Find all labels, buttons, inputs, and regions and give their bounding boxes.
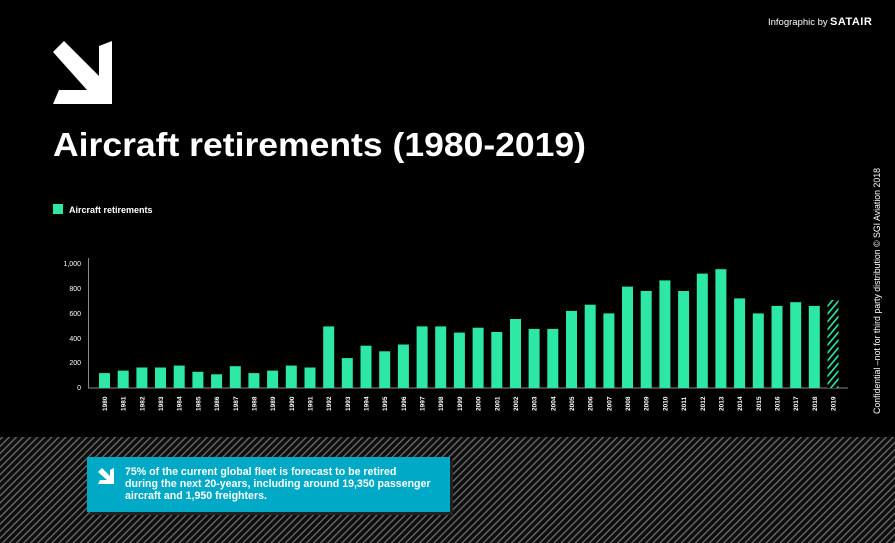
brand: infographic by SATAIR: SATAIR: [830, 16, 872, 28]
bar chart: [63, 258, 848, 411]
x axis year labels: 2012: [700, 396, 707, 411]
callout box: [87, 457, 453, 515]
x axis year labels: 1994: [364, 396, 370, 411]
x axis year labels: 2002: [513, 396, 520, 411]
legend: Aircraft retirements: [69, 205, 153, 215]
y axis labels: 0: [77, 385, 81, 392]
x axis year labels: 1995: [382, 396, 389, 411]
x axis year labels: 1992: [326, 396, 333, 411]
vertical confidentiality note: Confidential –not for third party distribution © SGI Aviation 2018: [872, 168, 882, 414]
callout box: during the next 20-years, including around 19,350 passenger: [125, 478, 431, 490]
x axis year labels: 1988: [251, 396, 258, 411]
callout box: 75% of the current global fleet is forecast to be retired: [125, 466, 396, 478]
y axis labels: 400: [69, 336, 81, 343]
x axis year labels: 1996: [401, 396, 408, 411]
x axis year labels: 1990: [289, 396, 296, 411]
x axis year labels: 2000: [476, 396, 483, 411]
icon: small arrow: [98, 468, 114, 484]
x axis year labels: 2017: [793, 396, 800, 411]
x axis year labels: 2014: [737, 396, 744, 411]
y axis labels: 200: [69, 360, 81, 367]
x axis year labels: 1981: [121, 396, 128, 411]
x axis year labels: 1986: [214, 396, 221, 411]
x axis year labels: 1983: [158, 396, 165, 411]
x axis year labels: 2001: [494, 396, 501, 411]
x axis year labels: 2009: [644, 396, 651, 411]
x axis year labels: 1999: [457, 396, 464, 411]
bars: [99, 269, 820, 388]
y axis labels: 600: [69, 311, 81, 318]
x axis year labels: 2004: [550, 396, 557, 411]
y axis labels: 800: [69, 286, 81, 293]
x axis year labels: [102, 396, 838, 411]
title: Aircraft retirements (1980-2019): [53, 126, 586, 163]
x axis year labels: 1991: [308, 396, 314, 411]
x axis year labels: 2007: [606, 396, 613, 411]
brand: infographic by SATAIR: Infographic by: [768, 17, 828, 28]
x axis year labels: 1987: [233, 396, 240, 411]
x axis year labels: 2003: [532, 396, 539, 411]
icon: arrow: [53, 41, 112, 104]
x axis year labels: 1980: [102, 396, 109, 411]
x axis year labels: 1984: [177, 396, 184, 411]
callout box: aircraft and 1,950 freighters.: [125, 490, 267, 502]
brand: infographic by SATAIR: [768, 16, 872, 28]
x axis year labels: 2015: [756, 396, 763, 411]
y axis labels: [63, 261, 81, 392]
x axis year labels: 2018: [812, 396, 819, 411]
y axis labels: 1,000: [63, 261, 81, 268]
x axis year labels: 2013: [718, 396, 725, 411]
x axis year labels: 1982: [139, 396, 146, 411]
x axis year labels: 2011: [681, 397, 688, 411]
x axis year labels: 1985: [195, 396, 202, 411]
x axis year labels: 1993: [345, 396, 352, 411]
x axis year labels: 1989: [270, 396, 277, 411]
x axis year labels: 2006: [588, 396, 595, 411]
x axis year labels: 2005: [569, 396, 576, 411]
x axis year labels: 2019: [830, 396, 838, 411]
x axis year labels: 1998: [438, 396, 445, 411]
x axis year labels: 2016: [774, 396, 782, 411]
x axis year labels: 2008: [625, 396, 632, 411]
striped footer background: [0, 437, 895, 543]
x axis year labels: 2010: [662, 396, 669, 411]
hatched 2019 bar (forecast): [828, 300, 838, 388]
x axis year labels: 1997: [420, 396, 427, 411]
